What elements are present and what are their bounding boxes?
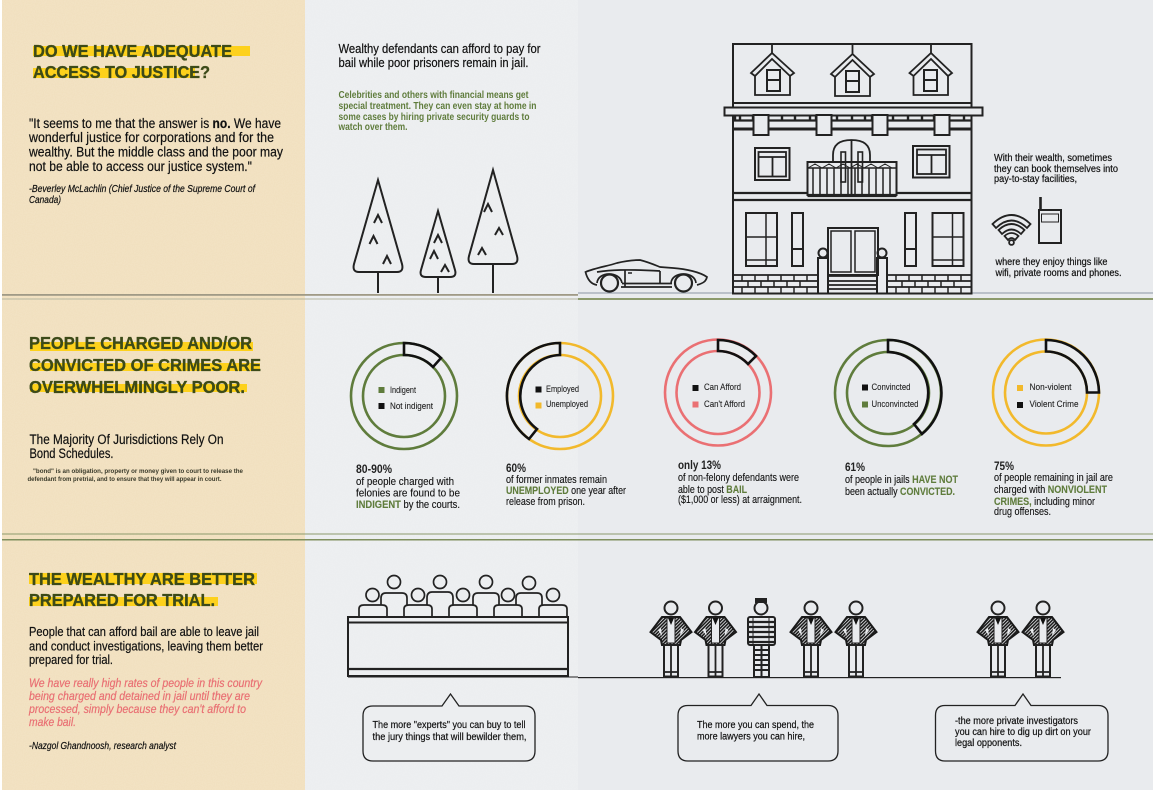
stat: 80-90% indigent: felonies are found to be — [356, 488, 460, 500]
stat: 75% nonviolent: 75% — [994, 459, 1014, 473]
stat: 61% not convicted: been actually CONVICTED. — [845, 486, 955, 498]
donut chart: can afford bail — [665, 340, 771, 446]
text: people that can afford bail: People that can afford bail are able to leave jail — [29, 625, 259, 639]
icon: prisoner — [748, 598, 775, 677]
stat: 75% nonviolent: of people remaining in jail are — [994, 472, 1113, 484]
callout: private investigators: -the more private investigators — [955, 716, 1078, 727]
stat: 60% unemployed: of former inmates remain — [506, 474, 607, 486]
text: bond definition: "bond" is an obligation, property or money given to court to release the — [33, 468, 243, 475]
donut chart: unemployed: Employed — [546, 384, 579, 394]
panel: beige left column — [2, 0, 305, 790]
donut chart: violent crime — [993, 340, 1099, 446]
stat: only 13%: of non-felony defendants were — [678, 472, 799, 484]
icon: lawyer — [836, 602, 876, 677]
green note: celebrities: special treatment. They can even stay at home in — [338, 101, 536, 112]
donut chart: unemployed — [507, 343, 613, 449]
stat: 75% nonviolent — [994, 459, 1113, 518]
icon: lawyer — [650, 602, 692, 677]
text: wifi and phones: wifi, private rooms and phones. — [995, 268, 1122, 279]
text: bond schedules: Bond Schedules. — [30, 446, 114, 461]
stat: 75% nonviolent: charged with NONVIOLENT — [994, 484, 1107, 496]
section 2 heading: PEOPLE CHARGED AND/OR — [29, 333, 252, 353]
panel: grey right column — [578, 0, 1153, 790]
quote: Nazgol Ghandnoosh: being charged and detained in jail until they are — [29, 689, 250, 703]
intro text: wealthy defendants: bail while poor prisoners remain in jail. — [338, 56, 528, 70]
icon: investigator — [978, 602, 1018, 677]
text: pay-to-stay facilities: they can book themselves into — [994, 164, 1118, 175]
green note: celebrities: Celebrities and others with financial means get — [338, 90, 529, 101]
callout: lawyers: more lawyers you can hire, — [697, 732, 805, 742]
green note: celebrities: some cases by hiring private security guards to — [338, 112, 530, 123]
stat: 60% unemployed: UNEMPLOYED one year after — [506, 485, 626, 497]
stat: 60% unemployed: release from prison. — [506, 496, 585, 508]
green note: celebrities — [338, 90, 536, 133]
stat: 60% unemployed: 60% — [506, 461, 526, 475]
icon: mansion — [724, 44, 982, 294]
callout: experts: The more "experts" you can buy to tell — [372, 720, 526, 731]
text: pay-to-stay facilities — [994, 153, 1118, 185]
callout: private investigators: you can hire to dig up dirt on your — [955, 727, 1092, 738]
stat: 60% unemployed — [506, 461, 626, 508]
donut chart: convicted: Unconvincted — [872, 399, 918, 409]
quote: Beverley McLachlin — [28, 116, 283, 174]
quote: Beverley McLachlin: not be able to access our justice system." — [29, 159, 252, 174]
icon: phone — [1039, 197, 1061, 243]
text: bond schedules: The Majority Of Jurisdictions Rely On — [30, 432, 224, 447]
intro text: wealthy defendants: Wealthy defendants can afford to pay for — [338, 42, 540, 56]
text: pay-to-stay facilities: With their wealth, sometimes — [994, 153, 1112, 164]
icon: wifi — [992, 215, 1030, 245]
stat: 61% not convicted: of people in jails HAVE NOT — [845, 474, 958, 486]
icon: trees — [354, 170, 517, 293]
donut chart: can afford bail: Can Afford — [704, 382, 741, 392]
icon: lawyer — [695, 602, 736, 677]
stat: only 13%: able to post BAIL — [678, 484, 747, 496]
callout: experts: the jury things that will bewilder them, — [372, 732, 526, 743]
text: bond schedules — [30, 432, 224, 461]
stat: only 13%: only 13% — [678, 458, 721, 472]
section 1 heading: ACCESS TO JUSTICE? — [33, 62, 210, 82]
section 3 heading — [29, 569, 257, 610]
quote: Beverley McLachlin: wonderful justice for corporations and for the — [28, 130, 274, 145]
icon: jury box — [348, 576, 578, 677]
panel: textured grey middle column — [305, 0, 578, 790]
ground line — [578, 677, 1061, 678]
stat: 80-90% indigent: 80-90% — [356, 462, 392, 476]
donut chart: can afford bail: Can't Afford — [704, 399, 745, 409]
intro text: wealthy defendants — [338, 42, 540, 70]
stat: 61% not convicted: 61% — [845, 460, 865, 474]
callout: lawyers: The more you can spend, the — [697, 720, 814, 731]
quote attribution: Canada) — [29, 195, 61, 206]
quote attribution: -Beverley McLachlin (Chief Justice of the Supreme Court of — [29, 184, 256, 195]
text: wifi and phones: where they enjoy things like — [995, 257, 1108, 268]
quote: Nazgol Ghandnoosh — [28, 676, 263, 729]
icon: lawyer — [790, 602, 832, 677]
donut chart: violent crime: Non-violent — [1030, 382, 1072, 392]
attribution: research analyst: -Nazgol Ghandnoosh, research analyst — [29, 741, 177, 752]
icon: investigator — [1022, 602, 1064, 677]
stat: 61% not convicted — [845, 460, 958, 498]
quote: Beverley McLachlin: wealthy. But the middle class and the poor may — [28, 144, 283, 160]
section 2 heading — [29, 333, 261, 397]
stat: only 13% — [678, 458, 802, 506]
donut chart: unemployed: Unemployed — [546, 399, 588, 409]
stat: 80-90% indigent — [356, 462, 460, 511]
text: wifi and phones — [995, 257, 1122, 279]
stat: 75% nonviolent: drug offenses. — [994, 506, 1051, 518]
quote: Beverley McLachlin: "It seems to me that the answer is no. We have — [29, 116, 281, 131]
stat: only 13%: ($1,000 or less) at arraignment. — [678, 494, 802, 506]
donut chart: convicted: Convincted — [872, 382, 910, 392]
section 3 heading: THE WEALTHY ARE BETTER — [29, 569, 255, 589]
text: people that can afford bail: and conduct investigations, leaving them better — [29, 640, 263, 654]
text: people that can afford bail — [29, 625, 263, 667]
text: people that can afford bail: prepared for trial. — [29, 653, 113, 667]
quote: Nazgol Ghandnoosh: We have really high rates of people in this country — [29, 676, 263, 690]
green note: celebrities: watch over them. — [338, 122, 408, 133]
quote attribution — [29, 184, 256, 206]
stat: 80-90% indigent: of people charged with — [356, 476, 454, 488]
donut chart: indigent: Indigent — [390, 385, 416, 395]
donut chart: convicted — [835, 340, 941, 446]
section 1 heading — [33, 41, 250, 82]
donut chart: violent crime: Violent Crime — [1030, 399, 1078, 409]
section 1 heading: DO WE HAVE ADEQUATE — [33, 41, 232, 61]
callout: experts — [363, 694, 535, 761]
text: bond definition: defendant from pretrial, and to ensure that they will appear in court. — [28, 476, 222, 483]
quote: Nazgol Ghandnoosh: make bail. — [29, 715, 76, 729]
stat: 80-90% indigent: INDIGENT by the courts. — [356, 499, 460, 511]
donut chart: indigent — [351, 343, 457, 449]
callout: lawyers — [678, 694, 838, 761]
callout: private investigators — [936, 694, 1108, 761]
section 2 heading: CONVICTED OF CRIMES ARE — [29, 355, 261, 375]
section 3 heading: PREPARED FOR TRIAL. — [29, 590, 215, 610]
text: pay-to-stay facilities: pay-to-stay facilities, — [994, 174, 1077, 185]
quote: Nazgol Ghandnoosh: processed, simply because they can't afford to — [28, 702, 246, 716]
callout: private investigators: legal opponents. — [955, 738, 1022, 749]
icon: sports car — [586, 260, 707, 292]
stat: 75% nonviolent: CRIMES, including minor — [994, 496, 1095, 508]
section 2 heading: OVERWHELMINGLY POOR. — [29, 377, 245, 397]
donut chart: indigent: Not indigent — [390, 401, 433, 411]
text: bond definition — [28, 468, 243, 483]
